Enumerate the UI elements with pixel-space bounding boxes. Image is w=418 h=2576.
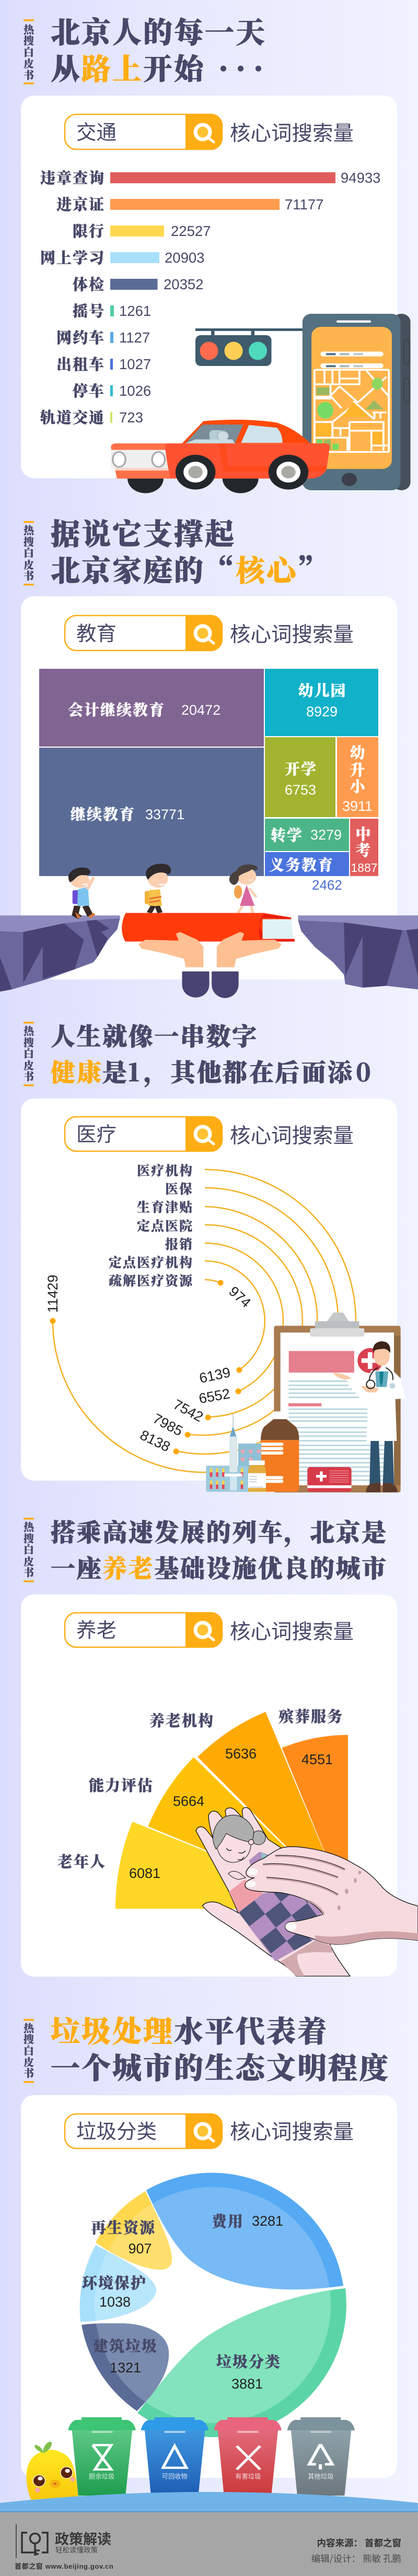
- bar chart: traffic keywords: 违章查询: [40, 167, 105, 188]
- illustration: clipboard with doctor and medicine: [206, 1313, 405, 1493]
- section label: 热搜白皮书: 皮: [24, 1057, 34, 1072]
- section label: 热搜白皮书: 书: [24, 67, 34, 82]
- treemap: education keywords: 升: [350, 759, 366, 780]
- search box: 医疗: 医疗: [76, 1118, 117, 1148]
- lower hand: [196, 1807, 350, 1976]
- rose fan chart: elderly care keywords: [57, 1705, 348, 1909]
- title line 2: garbage sorting: 一个城市的生态文明程度: [51, 2046, 390, 2087]
- radial arc chart: healthcare keywords: 生育津贴: [137, 1197, 193, 1216]
- panel: traffic card: [21, 96, 397, 478]
- pie chart: garbage sorting keywords: 再生资源: [91, 2216, 156, 2238]
- radial arc chart: healthcare keywords: 定点医疗机构: [109, 1252, 193, 1271]
- title line 2: education: 北京家庭的“核心”: [51, 548, 328, 590]
- rose fan chart: elderly care keywords: 能力评估: [89, 1774, 154, 1795]
- upper hand: [245, 1847, 418, 1944]
- title line 2: traffic: 从路上开始: [51, 46, 205, 88]
- section: elderly care: [21, 1514, 418, 1977]
- treemap: education keywords: 中: [355, 823, 372, 844]
- section: healthcare: [21, 1018, 405, 1493]
- section label: 热搜白皮书: 热: [24, 522, 35, 537]
- heading: 核心词搜索量: 核心词搜索量: [230, 1615, 354, 1645]
- bar chart: traffic keywords: 20352: [164, 276, 203, 292]
- treemap: education keywords: 开学: [285, 758, 317, 779]
- section label: 热搜白皮书: 热: [24, 1519, 35, 1534]
- section label: 热搜白皮书: 皮: [24, 557, 34, 572]
- search box: 养老: 养老: [76, 1614, 117, 1644]
- child: boy waving: [68, 868, 96, 918]
- bar chart: traffic keywords: 20903: [165, 250, 204, 266]
- treemap: education keywords: 20472: [181, 702, 220, 718]
- hand: right: [217, 932, 282, 967]
- bin: kitchen waste: 厨余垃圾: [89, 2472, 114, 2481]
- mascot: yellow chick: [27, 2442, 78, 2502]
- section label: 热搜白皮书: 皮: [24, 2054, 34, 2069]
- treemap: education keywords: 转学: [271, 824, 303, 845]
- rose fan chart: elderly care keywords: 老年人: [57, 1850, 106, 1872]
- title line 2: healthcare: 健康是1，其他都在后面添0: [51, 1054, 372, 1089]
- search box: 交通: 交通: [76, 116, 117, 146]
- radial arc chart: healthcare keywords: 7985: [150, 1411, 185, 1439]
- illustration: right cliff: [298, 915, 418, 989]
- section label: 热搜白皮书: 搜: [24, 1530, 34, 1545]
- treemap: education keywords: 继续教育: [71, 803, 135, 824]
- section: traffic: [21, 10, 411, 493]
- pie chart: garbage sorting keywords: 1038: [99, 2294, 131, 2310]
- search box: 交通: [65, 114, 223, 150]
- bar chart: traffic keywords: 体检: [73, 273, 105, 294]
- logo: key in brackets: [16, 2524, 48, 2558]
- pie chart: garbage sorting keywords: 环境保护: [82, 2272, 147, 2293]
- section label: 热搜白皮书: 白: [24, 1541, 34, 1556]
- section label: 热搜白皮书: 白: [24, 545, 34, 560]
- section label: 热搜白皮书: 热: [24, 1023, 35, 1038]
- bar chart: traffic keywords: 723: [119, 409, 143, 426]
- bin: hazardous waste: 有害垃圾: [235, 2472, 261, 2481]
- bar chart: traffic keywords: 网约车: [56, 326, 105, 348]
- search box: 医疗: [65, 1116, 223, 1152]
- illustration: grandmother resting in hands: [196, 1807, 418, 1976]
- heading: 核心词搜索量: 核心词搜索量: [230, 2116, 354, 2145]
- radial arc chart: healthcare keywords: 医保: [165, 1179, 193, 1198]
- radial arc chart: healthcare keywords: 6552: [198, 1386, 231, 1407]
- clipboard: [274, 1313, 401, 1493]
- section label: 热搜白皮书: 搜: [24, 2031, 34, 2046]
- child: girl in pink dress: [229, 865, 258, 913]
- radial arc chart: healthcare keywords: [45, 1161, 356, 1472]
- section label: 热搜白皮书: 白: [24, 44, 34, 59]
- rose fan chart: elderly care keywords: 殡葬服务: [278, 1705, 343, 1727]
- treemap: education keywords: 2462: [312, 877, 342, 893]
- illustration: book on hands: [122, 913, 295, 998]
- section label: 热搜白皮书: [24, 1022, 35, 1086]
- section label: 热搜白皮书: 白: [24, 2042, 34, 2058]
- title line 2: traffic: ···: [218, 46, 265, 88]
- section label: 热搜白皮书: 书: [24, 1068, 34, 1083]
- credit: source: 内容来源： 首都之窗: [317, 2536, 401, 2549]
- section label: 热搜白皮书: 热: [24, 2020, 35, 2035]
- bar chart: traffic keywords: 停车: [73, 380, 105, 401]
- radial arc chart: healthcare keywords: 定点医院: [137, 1216, 193, 1235]
- pie chart: garbage sorting keywords: 907: [128, 2241, 152, 2256]
- section label: 热搜白皮书: [24, 521, 35, 586]
- pill packs and syringe: [206, 1414, 266, 1492]
- illustration: three children walking: [68, 864, 258, 918]
- illustration: left cliff: [0, 915, 120, 991]
- treemap: education keywords: 1887: [351, 861, 378, 875]
- section label: 热搜白皮书: 书: [24, 2065, 34, 2080]
- heading: 核心词搜索量: 核心词搜索量: [230, 618, 354, 648]
- pie chart: garbage sorting keywords: 3281: [252, 2213, 283, 2229]
- rose fan chart: elderly care keywords: 4551: [301, 1752, 333, 1767]
- panel: healthcare card: [21, 1098, 397, 1481]
- treemap: education keywords: 3911: [342, 798, 373, 814]
- bar chart: traffic keywords: 1261: [119, 303, 151, 319]
- bar chart: traffic keywords: 1127: [119, 329, 150, 346]
- icon: red car: [111, 420, 330, 493]
- child: boy with yellow shirt: [145, 864, 171, 913]
- bar chart: traffic keywords: 摇号: [73, 300, 105, 321]
- radial arc chart: healthcare keywords: 11429: [45, 1274, 61, 1313]
- first aid kit: [307, 1467, 352, 1492]
- treemap: education keywords: 小: [350, 775, 367, 797]
- footer: [0, 2511, 418, 2576]
- icon: smartphone with map: [303, 314, 411, 490]
- section label: 热搜白皮书: 白: [24, 1045, 34, 1060]
- brand name: 政策解读: [55, 2528, 111, 2548]
- title: traffic: 北京人的每一天: [51, 10, 266, 52]
- treemap: education keywords: 幼: [350, 741, 366, 763]
- bin: recyclables: 可回收物: [162, 2472, 188, 2481]
- section label: 热搜白皮书: 皮: [24, 1553, 34, 1568]
- pie chart: garbage sorting keywords: 1321: [110, 2360, 141, 2376]
- pie chart: garbage sorting keywords: 垃圾分类: [216, 2350, 281, 2372]
- radial arc chart: healthcare keywords: 疏解医疗资源: [109, 1271, 193, 1290]
- section label: 热搜白皮书: 皮: [24, 55, 34, 70]
- treemap: education keywords: 3279: [310, 827, 342, 843]
- pie chart: garbage sorting keywords: 建筑垃圾: [93, 2335, 158, 2356]
- bar chart: traffic keywords: 71177: [285, 196, 323, 212]
- panel: garbage sorting card: [21, 2095, 397, 2478]
- bar chart: traffic keywords: 进京证: [56, 193, 105, 215]
- bar chart: traffic keywords: 94933: [341, 170, 380, 186]
- bar chart: traffic keywords: 出租车: [56, 353, 105, 374]
- bar chart: traffic keywords: 限行: [73, 220, 105, 241]
- rose fan chart: elderly care keywords: 6081: [129, 1865, 160, 1881]
- bar chart: traffic keywords: [40, 167, 380, 428]
- radial arc chart: healthcare keywords: 医疗机构: [137, 1161, 193, 1179]
- section label: 热搜白皮书: [24, 2019, 35, 2083]
- section label: 热搜白皮书: [24, 19, 35, 85]
- website: 首都之窗 www.beijing.gov.cn: [15, 2562, 113, 2570]
- section label: 热搜白皮书: 书: [24, 568, 34, 583]
- grandmother: [213, 1815, 270, 1880]
- panel: education card: [21, 596, 397, 979]
- pie chart: garbage sorting keywords: 费用: [212, 2210, 244, 2231]
- bar chart: traffic keywords: 网上学习: [40, 246, 105, 268]
- bin: hazardous waste: [214, 2417, 282, 2496]
- bar chart: traffic keywords: 1027: [119, 356, 151, 372]
- radial arc chart: healthcare keywords: 7542: [171, 1397, 206, 1425]
- search box: 垃圾分类: 垃圾分类: [76, 2116, 157, 2145]
- radial arc chart: healthcare keywords: 6139: [198, 1364, 232, 1386]
- garbage bins: [68, 2417, 355, 2496]
- section label: 热搜白皮书: 搜: [24, 32, 34, 48]
- title: garbage sorting: 垃圾处理水平代表着: [51, 2009, 328, 2051]
- title line 2: elderly care: 一座养老基础设施优良的城市: [51, 1550, 388, 1585]
- section: garbage sorting: [0, 2009, 418, 2512]
- search box: 教育: 教育: [76, 618, 117, 647]
- quilt: [229, 1876, 323, 1961]
- treemap: education keywords: 幼儿园: [298, 679, 347, 701]
- search box: 垃圾分类: [65, 2113, 223, 2149]
- sleeve: right: [212, 972, 239, 998]
- rose fan chart: elderly care keywords: 养老机构: [149, 1709, 214, 1731]
- section label: 热搜白皮书: 搜: [24, 1034, 34, 1049]
- title: elderly care: 搭乘高速发展的列车，北京是: [51, 1514, 388, 1549]
- treemap: education keywords: 8929: [306, 704, 338, 719]
- icon: traffic light: [195, 328, 303, 366]
- section: education: [0, 512, 418, 998]
- treemap: education keywords: 会计继续教育: [68, 699, 165, 720]
- radial arc chart: healthcare keywords: 8138: [137, 1427, 173, 1455]
- section label: 热搜白皮书: 搜: [24, 534, 34, 549]
- title: healthcare: 人生就像一串数字: [51, 1018, 258, 1053]
- credit: editors: 编辑/设计： 熊敏 孔鹏: [311, 2552, 401, 2565]
- radial arc chart: healthcare keywords: 974: [226, 1283, 254, 1311]
- pie chart: garbage sorting keywords: 3881: [231, 2376, 263, 2392]
- bin: other waste: 其他垃圾: [308, 2472, 334, 2481]
- bin: other waste: [287, 2417, 355, 2496]
- pie chart: garbage sorting keywords: [80, 2173, 346, 2437]
- bar chart: traffic keywords: 22527: [171, 223, 211, 239]
- heading: 核心词搜索量: 核心词搜索量: [230, 1119, 354, 1149]
- bin: kitchen waste: [68, 2417, 136, 2496]
- heading: 核心词搜索量: 核心词搜索量: [230, 117, 354, 147]
- treemap: education keywords: 6753: [285, 782, 316, 798]
- doctor: [333, 1341, 405, 1492]
- radial arc chart: healthcare keywords: 报销: [165, 1234, 193, 1253]
- treemap: education keywords: 33771: [145, 807, 184, 822]
- hand: left: [138, 932, 203, 967]
- section label: 热搜白皮书: [24, 1518, 35, 1582]
- brand tagline: 轻松读懂政策: [55, 2544, 98, 2555]
- search box: 教育: [65, 615, 223, 651]
- treemap: education keywords: 义务教育: [269, 854, 334, 875]
- section label: 热搜白皮书: 热: [24, 21, 35, 37]
- rose fan chart: elderly care keywords: 5664: [173, 1793, 204, 1809]
- section label: 热搜白皮书: 书: [24, 1564, 34, 1579]
- bar chart: traffic keywords: 轨道交通: [40, 406, 105, 428]
- treemap: education keywords: 考: [355, 839, 372, 860]
- title: education: 据说它支撑起: [51, 512, 236, 553]
- bin: recyclables: [141, 2417, 208, 2496]
- treemap: education keywords: [39, 669, 378, 893]
- sleeve: left: [182, 972, 210, 998]
- rose fan chart: elderly care keywords: 5636: [225, 1746, 257, 1762]
- panel: elderly care card: [21, 1594, 397, 1977]
- search box: 养老: [65, 1612, 223, 1648]
- medicine bottle: [261, 1411, 299, 1492]
- bar chart: traffic keywords: 1026: [119, 383, 151, 399]
- ground: [0, 2492, 418, 2512]
